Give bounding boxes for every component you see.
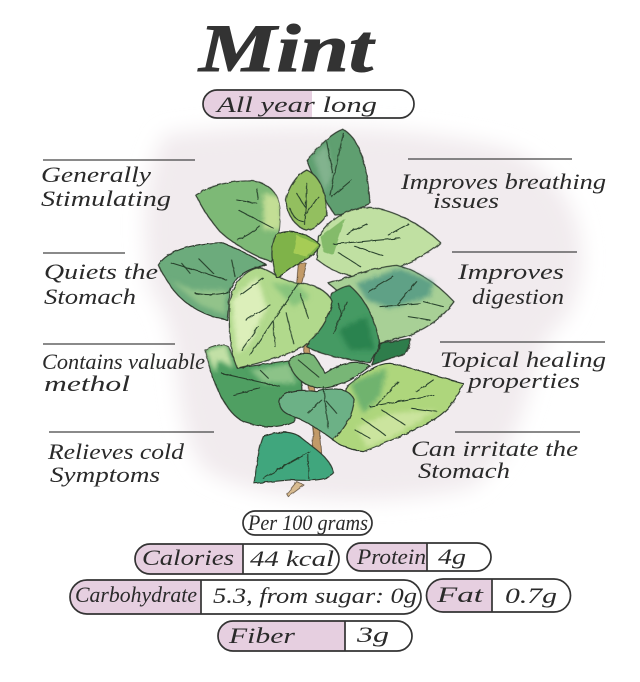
benefit: improves digestion: digestion: [472, 284, 564, 309]
calories pill: [135, 544, 339, 574]
season pill: All year long: [214, 92, 377, 117]
leaf: right teal: [328, 265, 454, 343]
stem: [297, 263, 322, 453]
benefit: relieves cold symptoms: Symptoms: [50, 462, 160, 487]
calories pill: 44 kcal: [250, 546, 334, 571]
benefit: topical healing properties: [440, 342, 606, 393]
title: Mint: [198, 10, 376, 86]
season pill: [203, 90, 414, 118]
benefit: topical healing properties: Topical healing: [440, 347, 606, 372]
fiber pill: 3g: [356, 622, 389, 647]
carbohydrate pill: [70, 580, 421, 614]
leaf: dark small: [372, 338, 410, 365]
carbohydrate pill: 5.3, from sugar: 0g: [213, 583, 417, 608]
benefit: topical healing properties: properties: [466, 368, 580, 393]
calories pill: Calories: [142, 545, 234, 570]
protein pill: Protein: [356, 544, 426, 569]
protein pill: 4g: [438, 544, 466, 569]
benefit: contains valuable methol: methol: [44, 371, 130, 396]
leaf: small centre: [272, 232, 320, 277]
benefit: relieves cold symptoms: Relieves cold: [47, 439, 185, 464]
leaf: left dark: [158, 243, 267, 320]
benefit: improves breathing issues: issues: [433, 188, 499, 213]
leaf: bottom teal: [254, 432, 334, 483]
fat pill: 0.7g: [505, 583, 557, 608]
leaf: small top: [286, 170, 327, 231]
leaf: lower centre: [279, 389, 354, 440]
benefit: can irritate the stomach: Stomach: [418, 458, 510, 483]
fiber pill: Fiber: [228, 623, 296, 648]
benefit: generally stimulating: [41, 160, 195, 211]
fat pill: [427, 579, 571, 612]
fiber pill: [218, 621, 412, 651]
leaf: right lower: [333, 363, 463, 452]
leaf: top dark: [307, 129, 370, 215]
leaf: left upper: [196, 181, 280, 262]
benefit: contains valuable methol: Contains valuable: [42, 349, 205, 374]
benefit: quiets the stomach: Quiets the: [44, 259, 158, 284]
per 100 grams pill: Per 100 grams: [247, 510, 368, 535]
benefit: can irritate the stomach: Can irritate the: [411, 436, 578, 461]
benefit: contains valuable methol: [42, 344, 205, 396]
benefit: improves digestion: [452, 252, 577, 309]
benefit: quiets the stomach: [43, 253, 158, 309]
leaf: right upper: [317, 207, 441, 277]
benefit: quiets the stomach: Stomach: [44, 284, 136, 309]
carbohydrate pill: Carbohydrate: [75, 582, 197, 607]
benefit: can irritate the stomach: [411, 432, 580, 483]
leaf: center large: [229, 267, 333, 368]
benefit: generally stimulating: Stimulating: [41, 186, 171, 211]
fat pill: Fat: [435, 582, 484, 607]
leaf: lower left: [205, 345, 302, 427]
benefit: relieves cold symptoms: [47, 432, 214, 487]
benefit: improves digestion: Improves: [457, 259, 564, 284]
leaf veins: [171, 133, 443, 478]
benefit: improves breathing issues: [400, 159, 606, 213]
background wash: [145, 127, 582, 500]
benefit: improves breathing issues: Improves breathing: [400, 169, 606, 194]
leaf: lower middle: [288, 353, 370, 388]
plant illustration: [158, 129, 463, 497]
protein pill: [347, 543, 491, 571]
leaf: mid dark: [307, 286, 379, 363]
benefit: generally stimulating: Generally: [41, 162, 151, 187]
